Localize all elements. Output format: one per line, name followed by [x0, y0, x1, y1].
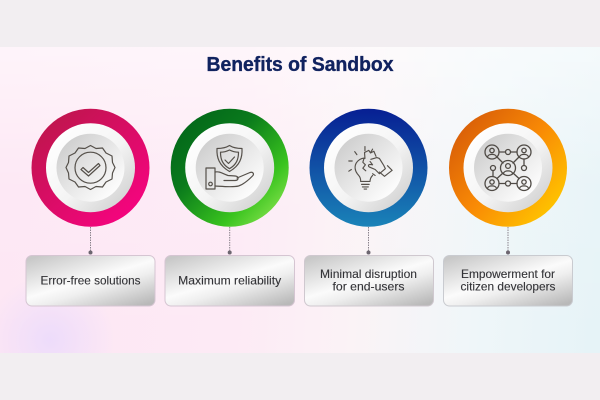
label box — [165, 256, 294, 306]
connector — [88, 227, 92, 254]
connector — [366, 227, 370, 254]
connector — [506, 227, 510, 254]
ring: orange — [449, 109, 567, 227]
label box: Error-free solutions — [40, 274, 140, 288]
connector — [228, 227, 232, 254]
icon: quality badge with check — [66, 146, 115, 190]
label box — [26, 256, 155, 306]
icon: hand holding shield — [206, 146, 253, 189]
label box — [304, 256, 434, 306]
panel: empowerment for citizen developers — [444, 109, 572, 306]
panel: maximum reliability — [165, 109, 294, 306]
icon: broken light bulb and hand — [349, 147, 392, 189]
label box — [444, 256, 572, 306]
ring: green — [171, 109, 289, 227]
panel: minimal disruption — [304, 109, 434, 306]
label box: citizen developers — [460, 280, 556, 294]
title: Benefits of Sandbox — [206, 54, 394, 76]
icon: connected people network — [485, 145, 531, 190]
ring: red — [32, 109, 150, 227]
label box: for end-users — [332, 280, 404, 294]
panel: error-free solutions — [26, 109, 155, 306]
label box: Empowerment for — [461, 267, 555, 281]
label box: Maximum reliability — [178, 274, 281, 288]
ring: blue — [310, 109, 428, 227]
label box: Minimal disruption — [320, 267, 417, 281]
